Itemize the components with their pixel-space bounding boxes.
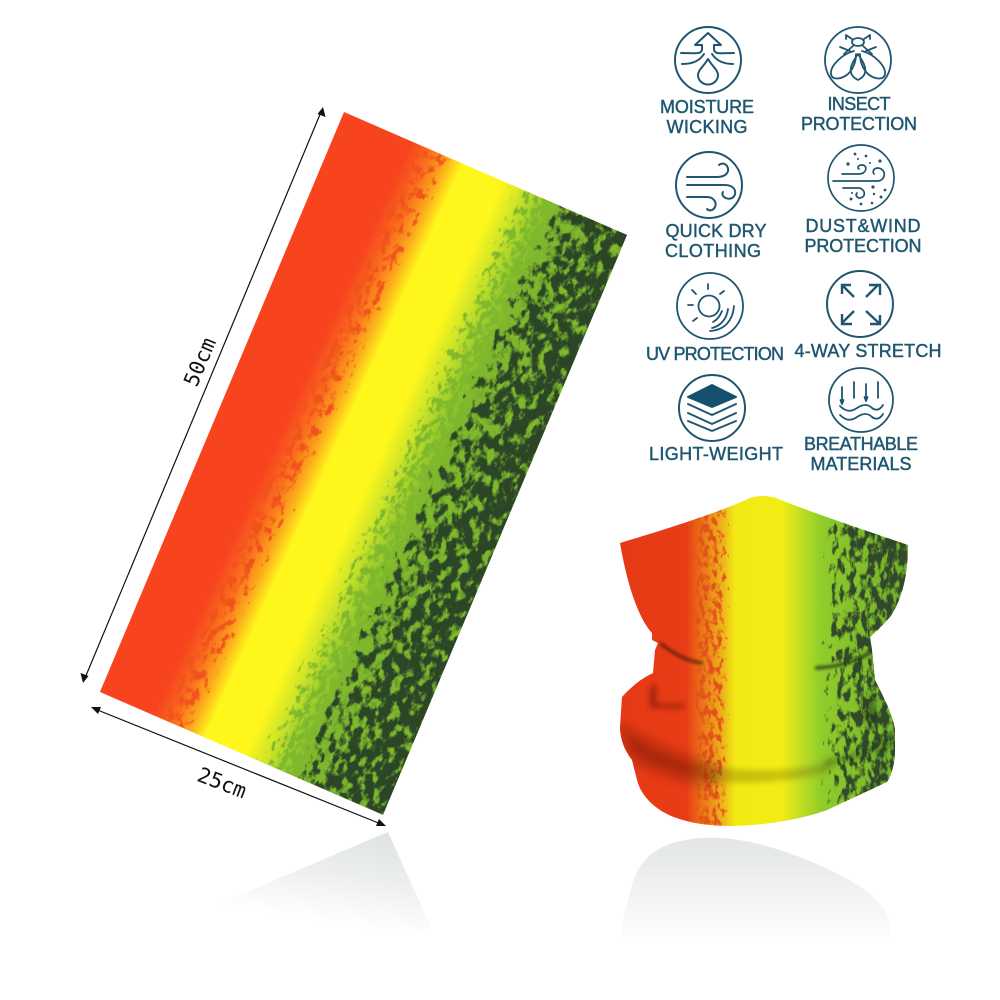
neck seams <box>660 643 703 663</box>
reflection: worn gaiter <box>620 838 890 946</box>
reflection: flat fabric <box>143 832 430 936</box>
label: moisture wicking: WICKING <box>666 117 748 137</box>
label: insect protection: INSECT <box>828 94 890 114</box>
label: UV protection: UV PROTECTION <box>646 344 784 364</box>
icon: insect protection <box>825 27 891 93</box>
shading: neck recess on the right <box>865 690 877 724</box>
label: moisture wicking: MOISTURE <box>660 97 754 117</box>
label: breathable materials: MATERIALS <box>810 454 912 474</box>
icon: UV protection <box>677 273 743 339</box>
icon: moisture wicking <box>675 27 741 93</box>
icon: dust and wind <box>828 145 894 211</box>
label: quick dry clothing: QUICK DRY <box>666 221 766 241</box>
label: breathable materials: BREATHABLE <box>804 434 918 454</box>
label: dust and wind protection: DUST&WIND <box>806 216 920 236</box>
label: 4-way stretch: 4-WAY STRETCH <box>794 341 942 361</box>
shading: lower fold, dark on the red side <box>618 722 715 784</box>
flat fabric panel, red yellow green gradient <box>100 112 627 815</box>
worn gaiter mask photo <box>610 490 910 835</box>
label: quick dry clothing: CLOTHING <box>665 241 761 261</box>
label: light-weight: LIGHT-WEIGHT <box>649 444 783 464</box>
arrow: width dimension <box>91 707 386 826</box>
icon: breathable materials <box>829 368 893 432</box>
label: insect protection: PROTECTION <box>801 114 917 134</box>
icon: 4-way stretch <box>827 271 893 337</box>
label: 25cm: 25cm <box>194 763 250 803</box>
arrow: height dimension <box>80 107 326 683</box>
label: dust and wind protection: PROTECTION <box>804 236 922 256</box>
shading: neck recess on the left <box>650 682 684 708</box>
icon: light-weight layers <box>679 375 745 441</box>
label: 50cm: 50cm <box>179 334 221 390</box>
icon: quick dry <box>676 152 742 218</box>
feature icons panel <box>646 27 942 474</box>
